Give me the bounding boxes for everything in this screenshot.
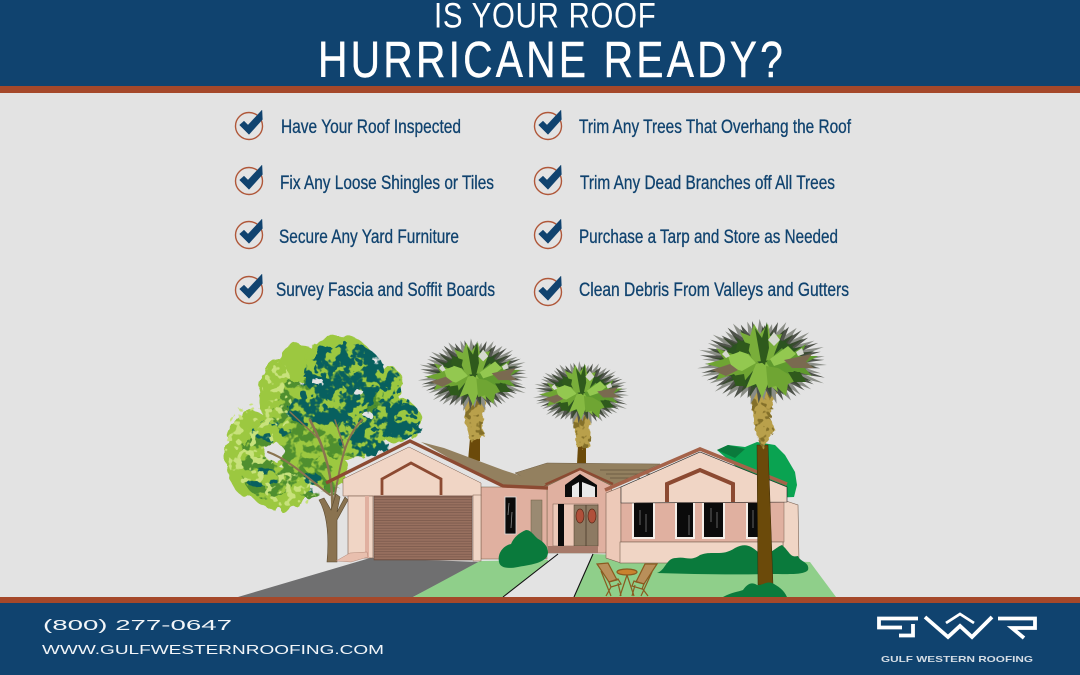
- garage inner gable trim: [382, 463, 441, 495]
- title: [318, 0, 783, 88]
- gable window: [565, 474, 597, 497]
- contact details: (800) 277-0647: [43, 618, 232, 634]
- right wing inner gable trim: [667, 470, 733, 502]
- checklist: left column: [236, 110, 495, 304]
- checklist: right column: Trim Any Trees That Overhang the Roof: [579, 117, 852, 138]
- logo: Gulf Western Roofing: [879, 614, 1035, 664]
- garage gable trim: [326, 441, 548, 488]
- right wing window band: [621, 502, 784, 542]
- side door: [531, 500, 542, 545]
- bush behind right wing: [717, 442, 797, 498]
- contact details: [42, 618, 384, 657]
- right wing far wall: [783, 500, 799, 562]
- middle section roof: [515, 463, 660, 486]
- middle gable trim: [542, 469, 613, 486]
- footer band: [0, 597, 1080, 675]
- hedge: [657, 545, 808, 574]
- garage door: [374, 496, 472, 560]
- right wing gable wall: [621, 452, 787, 503]
- garage roof slope: [421, 442, 546, 489]
- checklist: right column: [534, 110, 852, 306]
- contact details: WWW.GULFWESTERNROOFING.COM: [42, 642, 384, 657]
- patio table and chairs: [597, 563, 657, 596]
- ground: right lawn: [574, 554, 836, 597]
- right wing lower wall: [620, 542, 783, 563]
- palm tree left: [415, 336, 532, 461]
- checklist: left column: Secure Any Yard Furniture: [279, 227, 459, 248]
- middle section wall: [547, 470, 612, 553]
- title: HURRICANE READY?: [318, 31, 783, 88]
- palm tree right (tall): [694, 316, 831, 585]
- palm tree middle: [530, 359, 632, 464]
- entry: [548, 504, 598, 553]
- logo: Gulf Western Roofing: GULF WESTERN ROOFING: [881, 654, 1034, 664]
- header band: [0, 0, 1080, 93]
- garage right column: [473, 495, 481, 561]
- right wing gable trim: [605, 449, 787, 490]
- entry bush: [499, 530, 548, 568]
- side window: [505, 497, 516, 534]
- checklist: right column: Clean Debris From Valleys and Gutters: [579, 280, 849, 301]
- tree trunk: [319, 494, 348, 562]
- ground: left lawn: [413, 560, 548, 597]
- checklist: left column: Fix Any Loose Shingles or Tiles: [280, 173, 494, 194]
- garage gable wall: [343, 447, 481, 496]
- front bush: [723, 583, 787, 597]
- checklist: left column: Have Your Roof Inspected: [281, 117, 461, 138]
- garage wing side wall: [481, 487, 547, 559]
- checklist: left column: Survey Fascia and Soffit Boards: [276, 280, 495, 301]
- ground: walkway: [503, 554, 593, 597]
- right wing left wall: [606, 487, 621, 563]
- checklist: right column: Trim Any Dead Branches off All Trees: [580, 173, 835, 194]
- illustration: house and landscaping: [225, 316, 836, 597]
- garage left column: [336, 496, 373, 562]
- ground: driveway: [238, 558, 480, 597]
- oak tree: [225, 336, 422, 562]
- checklist: right column: Purchase a Tarp and Store as Needed: [579, 227, 838, 248]
